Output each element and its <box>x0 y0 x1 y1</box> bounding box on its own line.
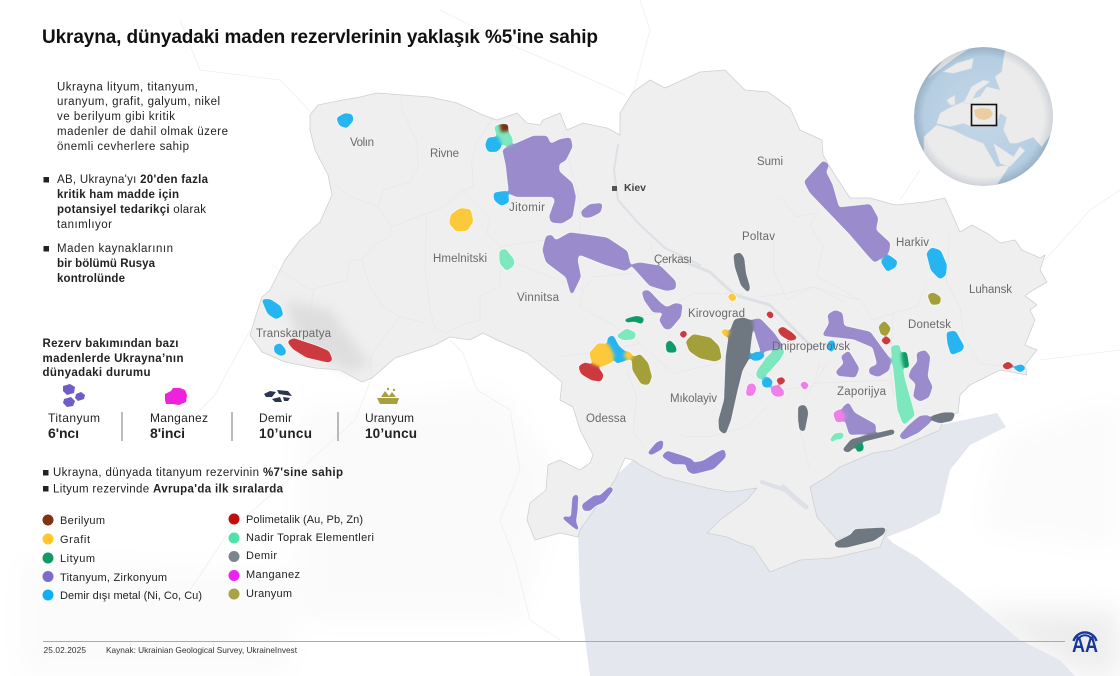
bullet: Rusya kontrolü: Maden kaynaklarının <box>57 243 173 255</box>
deposit: Transkarpatya non-ferrous north <box>263 300 282 318</box>
footer rule <box>43 641 1065 642</box>
deposit: graphite near Kirovograd <box>722 329 729 337</box>
stat: Titanyum: 6'ncı <box>48 425 79 441</box>
region labels: Dnipropetrovsk <box>772 341 850 353</box>
deposit: Donetsk uranium <box>879 322 890 334</box>
region borders <box>270 97 1007 470</box>
deposit: coastal titanium <box>900 416 930 439</box>
intro text: uranyum, grafit, galyum, nikel <box>57 96 220 108</box>
deposits on the map <box>263 114 1025 547</box>
deposit: Harkiv uranium <box>928 293 940 304</box>
deposit: Danube titanium <box>563 495 578 530</box>
deposit: north Jitomir rare earth <box>495 125 512 145</box>
region labels: Hmelnitski <box>433 253 487 265</box>
deposit: south Dnipro polymetallic <box>777 378 785 384</box>
region labels: Rivne <box>430 148 459 160</box>
deposit: Zaporijya iron <box>799 406 807 430</box>
bullet: Rusya kontrolü: kontrolünde <box>57 273 125 285</box>
ranking heading: madenlerde Ukrayna’nın <box>42 353 184 365</box>
deposit: Azov iron band <box>843 430 894 452</box>
stat: Uranyum: Uranyum <box>365 411 414 425</box>
region labels: Mıkolayiv <box>670 393 717 405</box>
facts: Lityum rezervinde Avrupa'da ilk sıralarda <box>53 484 284 496</box>
divider <box>338 412 339 441</box>
deposit: Vinnitsa rare earth <box>500 249 513 270</box>
deposit: Rivne border non-ferrous <box>486 138 501 151</box>
deposit: Mariupol iron <box>932 413 954 422</box>
deposit: Crimea iron <box>835 528 885 547</box>
stat: Demir: Demir <box>259 411 292 425</box>
intro text: önemli cevherlere sahip <box>57 141 189 153</box>
legend: Uranyum: Uranyum <box>246 588 292 600</box>
region labels: Volın <box>350 137 374 149</box>
deposit: Transkarpatya polymetallic <box>288 339 332 362</box>
deposit: eastern non-ferrous <box>1014 365 1025 372</box>
deposit: small graphite <box>728 294 736 301</box>
legend: Demir: Demir <box>246 550 277 562</box>
Ukraine highlight <box>974 108 993 120</box>
stat: Manganez: Manganez <box>150 411 208 425</box>
legend: Titanyum, Zirkonyum: Titanyum, Zirkonyum <box>60 572 167 584</box>
bullet: AB tedarikçi <box>44 174 209 231</box>
divider <box>232 412 233 441</box>
locator globe <box>914 43 1057 190</box>
legend: Grafit: Grafit <box>60 534 90 546</box>
region labels: Çerkası <box>654 254 692 266</box>
stat: Manganez: 8'inci <box>150 425 185 441</box>
legend: Berilyum: Berilyum <box>60 515 105 527</box>
deposit: lithium north <box>625 317 643 323</box>
deposit: Vinnitsa titanium <box>543 233 630 294</box>
bullet: Rusya kontrolü: bir bölümü Rusya <box>57 258 156 270</box>
stat: Uranyum: 10’uncu <box>365 426 417 441</box>
facts <box>43 467 343 496</box>
intro text <box>57 82 228 153</box>
deposit: lithium Donetsk <box>902 352 908 367</box>
legend <box>42 514 374 602</box>
deposit: Kryvyi Rih iron <box>719 318 753 433</box>
legend: Demir dışı metal: Demir dışı metal (Ni, Co, Cu) <box>60 590 202 602</box>
region labels: Zaporijya <box>837 386 887 398</box>
deposit: Cherkasy titanium <box>632 263 675 290</box>
deposit: Harkiv non-ferrous east <box>927 248 946 278</box>
deposit: Dnipro rare earth <box>757 349 784 379</box>
divider <box>122 412 123 441</box>
deposit: Zaporijya titanium north <box>837 352 858 377</box>
icon: uranium ore <box>377 388 399 404</box>
region labels: Vinnitsa <box>517 292 560 304</box>
region labels: Harkiv <box>896 237 929 249</box>
stat: Demir: 10’uncu <box>259 426 312 441</box>
region labels: Donetsk <box>908 319 951 331</box>
rivers and lagoons <box>614 145 815 507</box>
deposit: Donetsk titanium <box>909 351 932 401</box>
bullet: Rusya kontrolü <box>44 243 173 285</box>
deposit: east Dnipro titanium <box>823 311 890 376</box>
deposit: Harkiv non-ferrous west <box>882 256 897 271</box>
locator box <box>972 104 996 126</box>
deposit: Donetsk non-ferrous <box>947 332 963 354</box>
legend: Grafit <box>42 534 90 546</box>
ranking heading: dünyadaki durumu <box>42 367 150 379</box>
stat: Uranyum <box>365 388 417 441</box>
region labels: Sumi <box>757 156 783 168</box>
sea <box>578 413 1075 676</box>
legend: Nadir Toprak Elementleri: Nadir Toprak Elementleri <box>246 532 374 544</box>
title: Ukrayna, dünyadaki maden rezervlerinin yaklaşık %5'ine sahip <box>42 27 598 48</box>
deposit: coastal titanium 2 <box>663 452 693 463</box>
deposit: Sumy-Harkiv titanium <box>805 162 889 262</box>
deposit: beryllium <box>501 125 507 131</box>
deposit: lithium centre <box>667 341 676 352</box>
ranking heading: Rezerv bakımından bazı <box>42 338 178 350</box>
legend: Demir <box>228 550 277 562</box>
capital marker: Kiev: Kiev <box>624 182 646 194</box>
Anadolu Agency logo: AA <box>1072 632 1098 657</box>
bullet: AB tedarikçi: tanımlıyor <box>57 219 112 231</box>
deposit: Jitomir non-ferrous <box>494 192 508 205</box>
deposit: coastal titanium 3 <box>687 450 725 473</box>
deposit: small iron <box>799 406 807 431</box>
deposit: small graphite west <box>624 352 632 360</box>
stat: Manganez <box>150 388 208 441</box>
deposit: Dnipro titanium <box>753 319 783 352</box>
region labels <box>256 137 1012 425</box>
bullet: AB tedarikçi: kritik ham madde için <box>57 189 179 201</box>
legend: Berilyum <box>42 514 105 527</box>
deposit: Volin non-ferrous <box>337 114 353 127</box>
deposit: polymetallic band <box>778 327 797 340</box>
region labels: Odessa <box>586 413 627 425</box>
legend: Lityum <box>42 552 95 565</box>
deposit: Odessa coast titanium <box>583 487 613 510</box>
deposit: rare earth strip <box>892 346 914 424</box>
deposit: graphite west <box>590 344 613 366</box>
deposit: Zaporijya titanium south <box>843 403 875 434</box>
bullet: AB tedarikçi: AB, Ukrayna'yı 20'den fazla <box>57 174 209 186</box>
deposit: Jitomir titanium <box>503 137 575 223</box>
deposit: non-ferrous west <box>608 336 628 363</box>
deposit: Dnipro non-ferrous <box>750 352 764 360</box>
legend: Lityum: Lityum <box>60 553 95 565</box>
legend: Polimetalik: Polimetalik (Au, Pb, Zn) <box>246 514 363 526</box>
icon: iron ore <box>264 390 292 402</box>
deposit: coastal titanium 1 <box>648 441 663 454</box>
deposit: polymetallic centre <box>680 331 687 338</box>
Ukraine land <box>250 70 1047 572</box>
region labels: Jitomir <box>509 202 545 214</box>
stat: Titanyum: Titanyum <box>48 411 100 425</box>
icon: titanium rocks <box>63 384 85 407</box>
intro text: madenler de dahil olmak üzere <box>57 126 228 138</box>
deposit: Zaporijya manganese <box>834 410 845 422</box>
region labels: Kirovograd <box>688 308 745 320</box>
deposit: Poltav iron <box>734 253 749 292</box>
region labels: Transkarpatya <box>256 328 332 340</box>
Carpathian terrain <box>285 300 370 372</box>
deposit: Transkarpatya non-ferrous south <box>275 344 285 355</box>
deposit: Donetsk polymetallic <box>882 337 891 344</box>
capital marker: Kiev <box>612 182 646 194</box>
deposit: uranium centre <box>687 335 721 361</box>
footer source: Kaynak: Ukrainian Geological Survey, UkraineInvest <box>106 645 298 655</box>
footer date: 25.02.2025 <box>44 645 86 655</box>
region labels: Luhansk <box>969 284 1012 296</box>
deposit: small polymetallic <box>767 312 773 318</box>
deposit: Dnipro small non-ferrous <box>828 341 835 352</box>
deposit: south Dnipro non-ferrous <box>762 377 772 387</box>
deposit: manganese west <box>747 384 756 395</box>
deposit: uranium west <box>633 355 651 384</box>
legend: Manganez: Manganez <box>246 569 300 581</box>
deposit: polymetallic west <box>579 363 603 381</box>
facts: Ukrayna, dünyada titanyum rezervinin %7'sine sahip <box>53 467 343 479</box>
region labels: Poltav <box>742 231 775 243</box>
deposit: Kirovograd titanium <box>643 291 682 328</box>
bullet: AB tedarikçi: potansiyel tedarikçi olarak <box>57 204 206 216</box>
stat: Demir <box>259 390 312 441</box>
ranking heading <box>42 338 184 379</box>
icon: manganese ore <box>165 388 187 405</box>
deposit: Zaporijya lithium <box>857 444 863 451</box>
deposit: small titanium <box>582 204 602 217</box>
deposit: Hmelnitski graphite <box>450 209 472 231</box>
intro text: ve berilyum gibi kritik <box>57 111 175 123</box>
deposit: rare earth west <box>617 329 635 339</box>
stat: Titanyum <box>48 384 100 441</box>
deposit: eastern polymetallic <box>1003 362 1013 369</box>
deposit: manganese east <box>801 382 808 389</box>
intro text: Ukrayna lityum, titanyum, <box>57 82 198 94</box>
deposit: Zaporijya rare earth <box>831 433 843 442</box>
deposit: manganese centre <box>772 386 783 396</box>
